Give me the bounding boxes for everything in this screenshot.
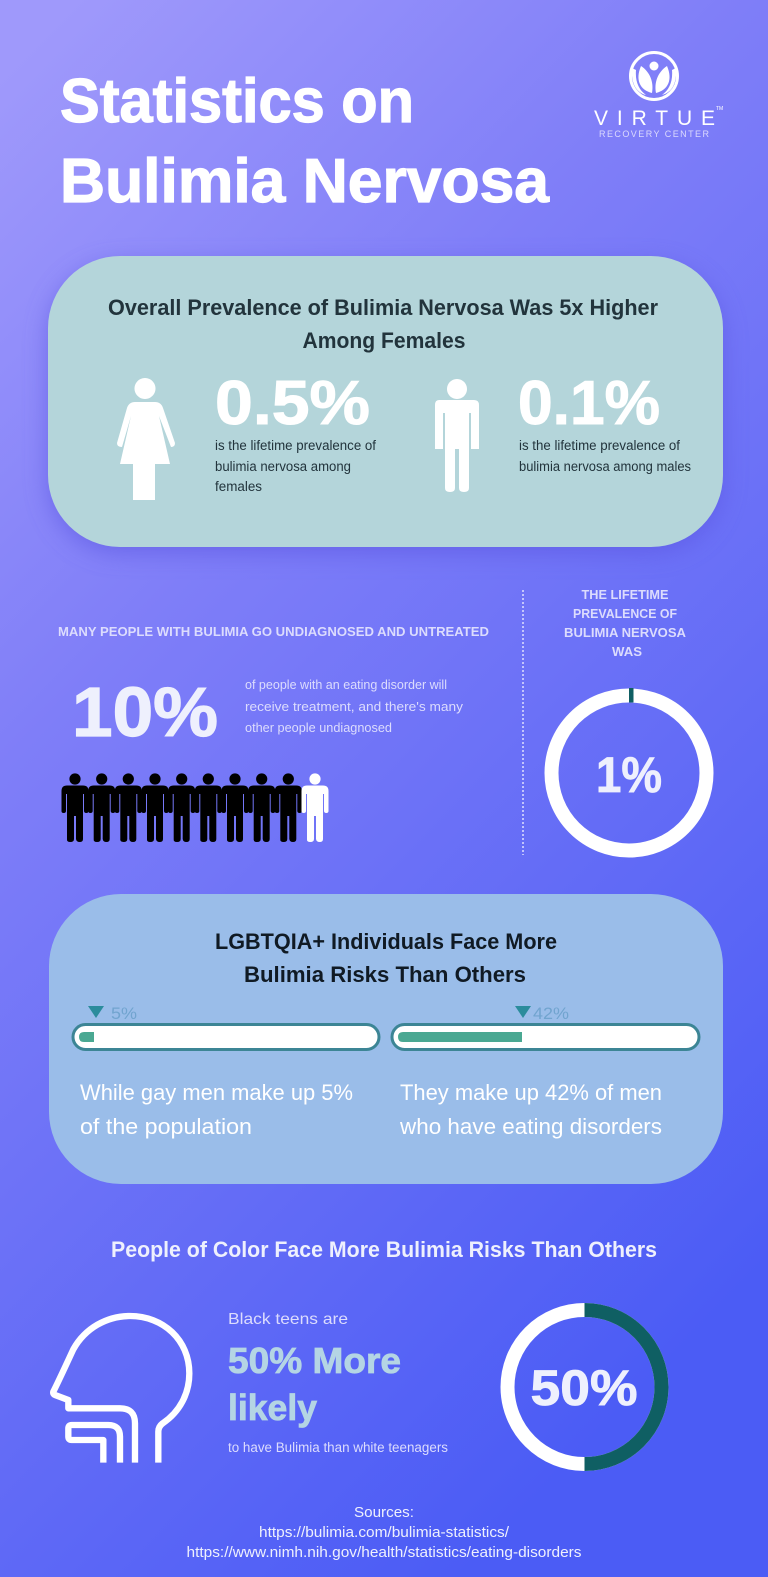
sources: https://bulimia.com/bulimia-statistics/ (259, 1524, 510, 1541)
text: treatment description: of people with an eating disorder will (245, 678, 447, 692)
text: share of men with eating disorders (399, 1080, 662, 1139)
sources: https://www.nimh.nih.gov/health/statistics/eating-disorders (186, 1544, 582, 1561)
text: share of men with eating disorders: who have eating disorders (399, 1114, 662, 1139)
logo: Virtue Recovery Center: VIRTUE (594, 107, 715, 130)
logo: Virtue Recovery Center: RECOVERY CENTER (599, 129, 710, 139)
heading: lifetime prevalence: WAS (612, 645, 642, 659)
heading: lifetime prevalence: PREVALENCE OF (573, 607, 677, 621)
sources (186, 1504, 582, 1561)
stat: 10%: 10% (72, 673, 218, 751)
stat: 0.5%: 0.5% (215, 369, 370, 438)
stat: 50% more likely: likely (228, 1387, 317, 1428)
title: Bulimia Nervosa (60, 147, 550, 216)
donut chart: 1% (552, 688, 706, 850)
logo: Virtue Recovery Center: TM (716, 106, 723, 112)
heading: undiagnosed and untreated: MANY PEOPLE WITH BULIMIA GO UNDIAGNOSED AND UNTREATED (58, 625, 489, 639)
text: female description (215, 438, 376, 494)
icon: male figure (435, 379, 479, 492)
panel heading: Overall Prevalence of Bulimia Nervosa Was 5x Higher (108, 295, 658, 320)
panel heading: Among Females (302, 328, 466, 353)
text: male description (519, 438, 691, 474)
panel: LGBTQIA+ risks (49, 894, 723, 1184)
text: than white teenagers: to have Bulimia than white teenagers (228, 1440, 448, 1455)
heading: lifetime prevalence (564, 588, 686, 659)
title: Statistics on (60, 67, 414, 136)
text: female description: is the lifetime prevalence of (215, 438, 376, 453)
text: gay men population share: of the population (80, 1114, 252, 1139)
logo: Virtue Recovery Center (594, 52, 723, 139)
bar: 5% (73, 1004, 379, 1050)
panel heading: LGBTQIA+ Individuals Face More (215, 929, 557, 954)
text: female description: bulimia nervosa among (215, 459, 351, 474)
donut chart: 50% (508, 1310, 662, 1464)
heading: lifetime prevalence: BULIMIA NERVOSA (564, 626, 686, 640)
panel: prevalence by sex (48, 256, 723, 553)
panel heading: Bulimia Risks Than Others (244, 962, 526, 987)
heading: lifetime prevalence: THE LIFETIME (582, 588, 668, 602)
icon: head and throat (53, 1316, 189, 1463)
panel heading (108, 295, 658, 353)
text: treatment description: other people undiagnosed (245, 721, 392, 735)
donut chart: 1%: 1% (596, 747, 662, 803)
text: treatment description: receive treatment, and there's many (245, 700, 464, 714)
bar: 42%: 42% (533, 1004, 569, 1023)
stat: 50% more likely (228, 1340, 401, 1428)
text: black teens are: Black teens are (228, 1311, 348, 1328)
title (60, 67, 550, 216)
text: gay men population share: While gay men make up 5% (80, 1080, 353, 1105)
icon row: ten people (61, 773, 328, 842)
text: treatment description (245, 678, 464, 735)
stat: 0.1%: 0.1% (518, 369, 660, 438)
text: share of men with eating disorders: They make up 42% of men (400, 1080, 662, 1105)
donut chart: 50%: 50% (530, 1360, 638, 1416)
text: gay men population share (80, 1080, 353, 1139)
text: male description: bulimia nervosa among males (519, 459, 691, 474)
bar: 5%: 5% (111, 1004, 137, 1023)
bar: 42% (392, 1004, 699, 1050)
text: male description: is the lifetime prevalence of (519, 438, 680, 453)
text: female description: females (215, 479, 262, 494)
panel heading (215, 929, 557, 987)
heading: people of color: People of Color Face More Bulimia Risks Than Others (111, 1237, 657, 1262)
icon: female figure (117, 378, 175, 500)
sources: Sources: (354, 1504, 414, 1521)
stat: 50% more likely: 50% More (228, 1340, 401, 1381)
